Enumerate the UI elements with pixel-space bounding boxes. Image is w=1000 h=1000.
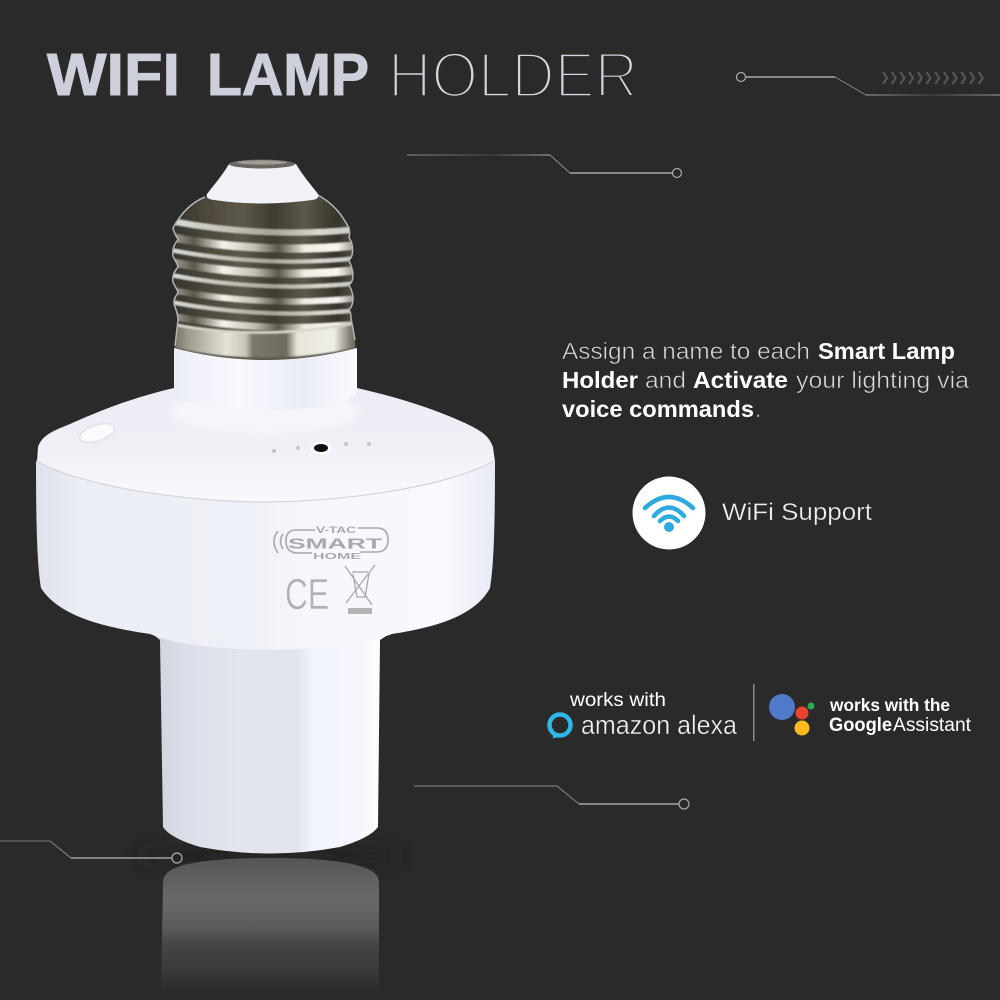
Amazon Alexa badge (550, 690, 738, 740)
title: LAMP (207, 42, 369, 108)
Amazon Alexa badge: works with (569, 690, 666, 711)
WiFi support feature (632, 476, 872, 550)
title (47, 39, 638, 111)
title: WIFI (47, 42, 180, 108)
product: lamp holder (36, 160, 495, 854)
description text: Smart Lamp (818, 338, 955, 364)
product reflection (135, 847, 405, 990)
V-TAC smart home logo: HOME (313, 551, 362, 561)
Google Assistant badge: Google (829, 714, 892, 736)
connector line: top right with chevrons (736, 72, 1000, 95)
V-TAC smart home logo (274, 525, 388, 561)
feature label: WiFi Support (722, 499, 872, 526)
CE mark: CE (285, 570, 329, 619)
white tip (207, 160, 318, 204)
description text: your lighting via (796, 367, 969, 393)
V-TAC smart home logo: V-TAC (316, 525, 357, 535)
description text: Assign a name to each (562, 338, 810, 364)
icon: wifi (632, 476, 706, 550)
side oval button (77, 420, 117, 446)
Google Assistant badge: Assistant (893, 714, 972, 736)
main housing (36, 462, 495, 650)
divider (753, 684, 754, 741)
icon: alexa ring (550, 714, 570, 738)
collar halo (170, 390, 360, 434)
Google Assistant badge (769, 694, 972, 736)
WEEE bin icon (345, 565, 375, 614)
description text (562, 338, 969, 422)
title: HOLDER (388, 39, 638, 111)
lower body and neck (150, 632, 392, 854)
metal screw thread (174, 196, 356, 360)
icon: google assistant dots (769, 694, 814, 736)
description text: voice commands (562, 396, 754, 422)
V-TAC smart home logo: SMART (288, 536, 382, 552)
description text: and (645, 367, 686, 393)
Google Assistant badge: works with the (829, 695, 950, 715)
connector line: bottom centre (414, 786, 689, 809)
microphone hole and dots (272, 441, 371, 455)
housing shoulder (37, 388, 495, 502)
description text: Holder (562, 367, 638, 393)
connector line: bottom left (0, 841, 182, 863)
white collar (174, 348, 357, 411)
description text: . (755, 396, 761, 422)
description text: Activate (693, 367, 788, 393)
housing seam (36, 461, 494, 502)
Amazon Alexa badge: amazon alexa (581, 710, 738, 740)
connector line: upper centre (407, 155, 682, 178)
metal outline (173, 195, 355, 346)
